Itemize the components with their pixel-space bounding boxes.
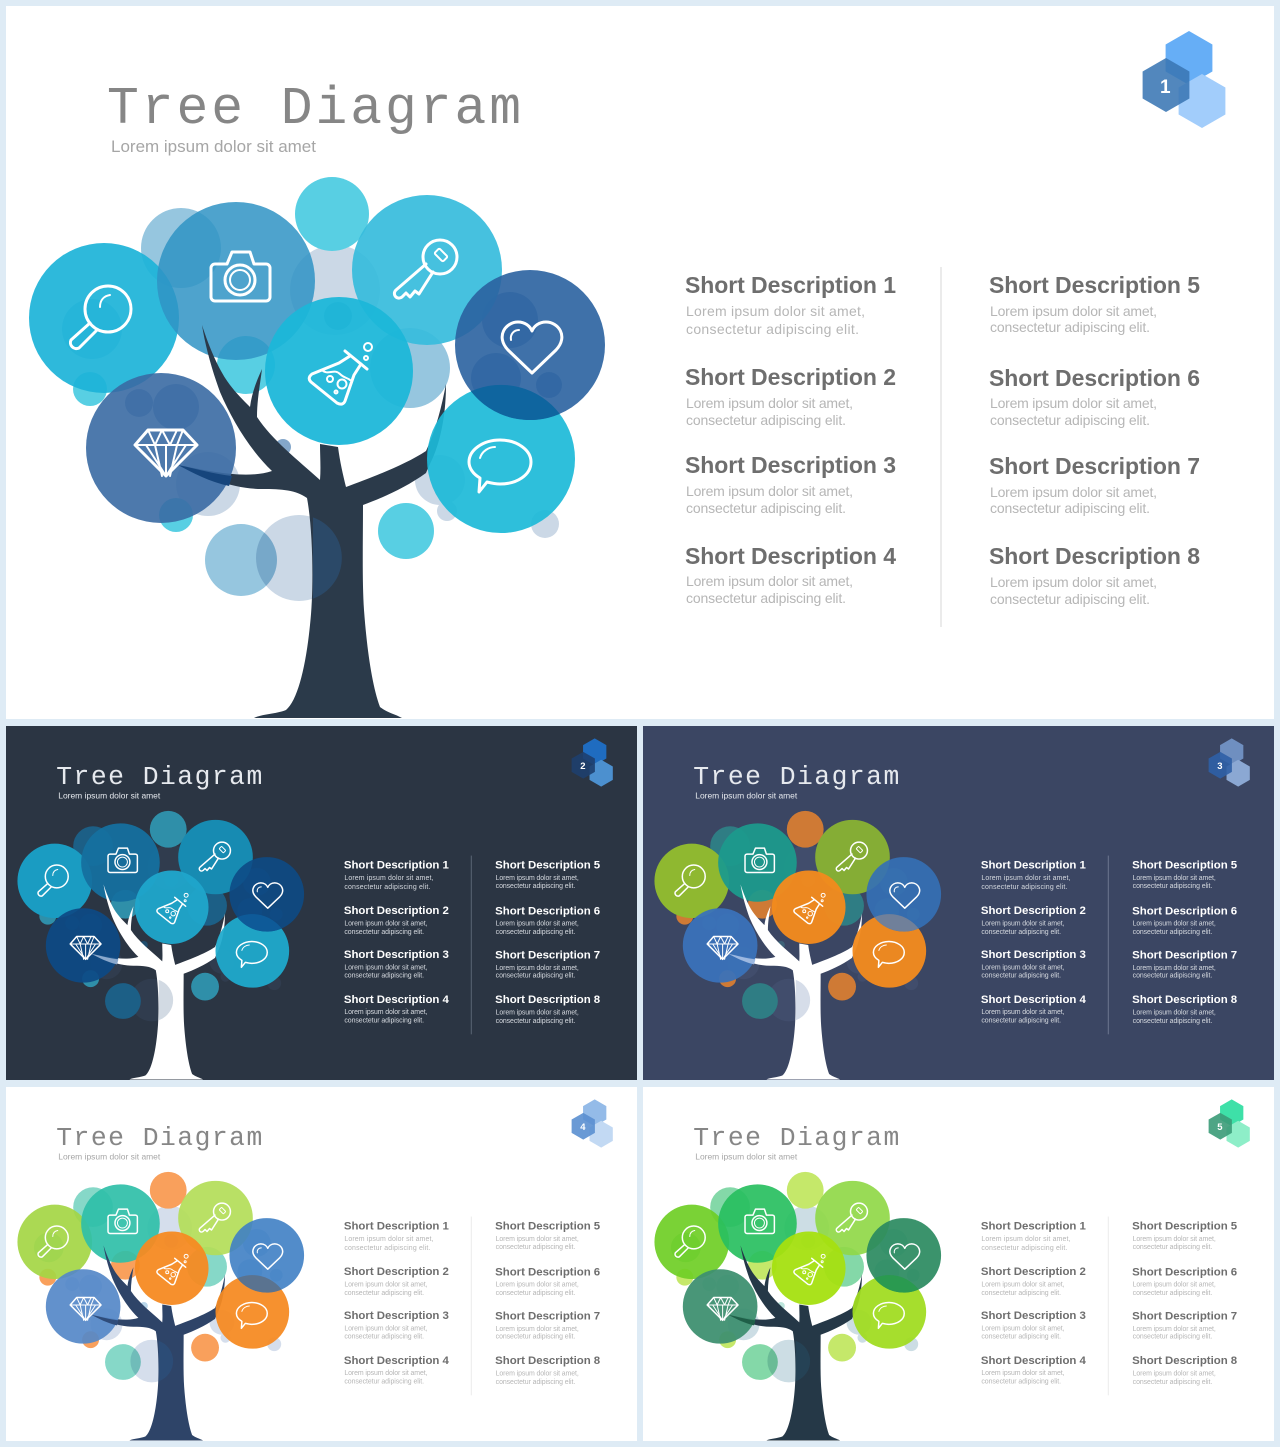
node: diamond xyxy=(86,373,236,523)
description 7: Short Description 7 xyxy=(989,453,1200,479)
description 3: Lorem ipsum dolor sit amet, xyxy=(344,964,428,971)
description 6 xyxy=(989,365,1200,428)
description 8: Short Description 8 xyxy=(1132,994,1237,1006)
description 1: Short Description 1 xyxy=(344,860,450,871)
description 8: Lorem ipsum dolor sit amet, xyxy=(1133,1370,1216,1377)
bubble tint on trunk xyxy=(796,980,810,1020)
background bubbles xyxy=(671,1172,920,1382)
badge: hexagons with number 2 xyxy=(572,738,613,787)
node: chat xyxy=(853,1275,926,1349)
description 3: Lorem ipsum dolor sit amet, xyxy=(981,1325,1065,1332)
node: chat xyxy=(853,914,926,988)
description 5: Lorem ipsum dolor sit amet, xyxy=(496,1236,579,1243)
description 5: Lorem ipsum dolor sit amet, xyxy=(496,875,579,882)
description 3: Short Description 3 xyxy=(685,452,896,478)
description 7: Short Description 7 xyxy=(495,1310,600,1322)
description 1: Lorem ipsum dolor sit amet, xyxy=(344,1236,434,1243)
node: heart xyxy=(866,1218,941,1293)
description 8 xyxy=(989,543,1200,607)
description 7: consectetur adipiscing elit. xyxy=(1133,1334,1212,1341)
description 3 xyxy=(344,1310,449,1341)
badge: hexagons with number 1: 1 xyxy=(1160,77,1171,98)
description 4 xyxy=(685,543,896,606)
description 4 xyxy=(981,1355,1087,1385)
description 4: Lorem ipsum dolor sit amet, xyxy=(686,573,853,589)
description 8: Short Description 8 xyxy=(495,994,600,1006)
node: flask xyxy=(135,1231,209,1305)
node: key xyxy=(352,195,502,345)
description 7: Short Description 7 xyxy=(495,949,600,961)
description 4 xyxy=(344,1355,450,1385)
description 6 xyxy=(495,906,600,936)
tree trunk xyxy=(92,884,225,1080)
description 3 xyxy=(981,949,1086,980)
node: heart xyxy=(229,1218,304,1293)
description 7: Short Description 7 xyxy=(1132,1310,1237,1322)
description 1 xyxy=(685,272,896,337)
description 4: consectetur adipiscing elit. xyxy=(981,1378,1061,1385)
node: search xyxy=(654,1205,729,1279)
description 6: consectetur adipiscing elit. xyxy=(1133,929,1212,936)
node: heart xyxy=(455,270,605,420)
node: diamond xyxy=(46,1269,120,1344)
panel: white multicolor theme xyxy=(6,1087,637,1441)
description 5: Lorem ipsum dolor sit amet, xyxy=(1133,875,1216,882)
description 3: consectetur adipiscing elit. xyxy=(981,973,1061,980)
node: flask xyxy=(135,870,209,944)
description 1: Short Description 1 xyxy=(685,272,896,298)
description 2: Lorem ipsum dolor sit amet, xyxy=(344,921,428,928)
description 2: consectetur adipiscing elit. xyxy=(981,1290,1061,1297)
panel: white green theme xyxy=(643,1087,1274,1441)
panel: main slide light blue theme xyxy=(6,6,1274,719)
description 6: Short Description 6 xyxy=(1132,906,1237,918)
description 3: Short Description 3 xyxy=(344,949,449,961)
description 8 xyxy=(1132,1355,1237,1386)
description 4: Short Description 4 xyxy=(344,994,450,1006)
description 7 xyxy=(1132,949,1237,980)
description 5 xyxy=(989,272,1200,335)
description 8: consectetur adipiscing elit. xyxy=(990,591,1150,607)
description 2: consectetur adipiscing elit. xyxy=(686,412,846,428)
description 4: Lorem ipsum dolor sit amet, xyxy=(981,1009,1065,1016)
description 7: Lorem ipsum dolor sit amet, xyxy=(1133,965,1216,972)
description 2: consectetur adipiscing elit. xyxy=(344,929,424,936)
description 3: Short Description 3 xyxy=(981,1310,1086,1322)
badge: hexagons with number 3 xyxy=(1209,738,1250,787)
description 2 xyxy=(981,905,1086,936)
node: heart xyxy=(866,857,941,932)
description 8: Lorem ipsum dolor sit amet, xyxy=(990,574,1157,590)
description 8: Lorem ipsum dolor sit amet, xyxy=(496,1370,579,1377)
description 1: Lorem ipsum dolor sit amet, xyxy=(981,875,1071,882)
description 5: consectetur adipiscing elit. xyxy=(990,319,1150,335)
description 2: Lorem ipsum dolor sit amet, xyxy=(686,395,853,411)
node: diamond xyxy=(683,908,757,983)
node: chat xyxy=(216,914,289,988)
description 5: Short Description 5 xyxy=(495,1221,601,1232)
bubble tint on trunk xyxy=(313,517,342,599)
description 4: consectetur adipiscing elit. xyxy=(981,1017,1061,1024)
description 5: Short Description 5 xyxy=(495,860,601,871)
subtitle: Lorem ipsum dolor sit amet xyxy=(58,790,161,800)
tree trunk xyxy=(178,325,446,718)
description 5: consectetur adipiscing elit. xyxy=(1133,1244,1212,1251)
description 6: Short Description 6 xyxy=(495,906,600,918)
description 1: consectetur adipiscing elit. xyxy=(981,884,1068,891)
description 1 xyxy=(981,860,1087,891)
description 3 xyxy=(981,1310,1086,1341)
panel: dark slate theme xyxy=(6,726,637,1080)
description 1 xyxy=(344,860,450,891)
description 3: Lorem ipsum dolor sit amet, xyxy=(981,964,1065,971)
description 3: consectetur adipiscing elit. xyxy=(981,1334,1061,1341)
description 2 xyxy=(344,1266,449,1297)
description 3 xyxy=(685,452,896,516)
description 1: consectetur adipiscing elit. xyxy=(981,1245,1068,1252)
description 3: Lorem ipsum dolor sit amet, xyxy=(344,1325,428,1332)
description 6: Lorem ipsum dolor sit amet, xyxy=(496,921,579,928)
description 7: Lorem ipsum dolor sit amet, xyxy=(496,1326,579,1333)
description 7: consectetur adipiscing elit. xyxy=(1133,973,1212,980)
title: Tree Diagram xyxy=(56,1123,262,1153)
description 7 xyxy=(1132,1310,1237,1341)
badge: hexagons with number 3: 3 xyxy=(1217,761,1223,772)
description 3: consectetur adipiscing elit. xyxy=(344,1334,424,1341)
description 7: consectetur adipiscing elit. xyxy=(990,500,1150,516)
description 6: Short Description 6 xyxy=(1132,1267,1237,1279)
description 2: Short Description 2 xyxy=(685,364,896,390)
background bubbles xyxy=(34,811,283,1021)
description 4: Short Description 4 xyxy=(344,1355,450,1367)
description 2: Lorem ipsum dolor sit amet, xyxy=(981,921,1065,928)
node: diamond xyxy=(46,908,120,983)
description 4: Lorem ipsum dolor sit amet, xyxy=(344,1370,428,1377)
description 6: Lorem ipsum dolor sit amet, xyxy=(990,395,1157,411)
description 3: consectetur adipiscing elit. xyxy=(686,500,846,516)
description 5 xyxy=(1132,1221,1238,1251)
column divider xyxy=(940,267,942,627)
node: camera xyxy=(81,1184,160,1263)
description 2 xyxy=(344,905,449,936)
description 1: Lorem ipsum dolor sit amet, xyxy=(981,1236,1071,1243)
background bubbles xyxy=(34,1172,283,1382)
description 1: Lorem ipsum dolor sit amet, xyxy=(344,875,434,882)
background bubbles xyxy=(671,811,920,1021)
description 7: Lorem ipsum dolor sit amet, xyxy=(496,965,579,972)
description 4: Short Description 4 xyxy=(981,1355,1087,1367)
description 2: Lorem ipsum dolor sit amet, xyxy=(344,1282,428,1289)
description 8: Lorem ipsum dolor sit amet, xyxy=(1133,1009,1216,1016)
description 2: consectetur adipiscing elit. xyxy=(344,1290,424,1297)
description 6: consectetur adipiscing elit. xyxy=(496,929,575,936)
description 8: consectetur adipiscing elit. xyxy=(496,1018,575,1025)
bubble tint on trunk xyxy=(159,980,173,1020)
description 1: Short Description 1 xyxy=(344,1221,450,1232)
node: flask xyxy=(772,1231,846,1305)
description 7 xyxy=(495,949,600,980)
bubble tint on trunk xyxy=(159,1341,173,1381)
node: search xyxy=(17,844,92,918)
node: camera xyxy=(718,1184,797,1263)
title: Tree Diagram xyxy=(56,762,262,792)
description 6: consectetur adipiscing elit. xyxy=(496,1290,575,1297)
description 3: Lorem ipsum dolor sit amet, xyxy=(686,483,853,499)
node: key xyxy=(815,1181,890,1255)
description 5: Short Description 5 xyxy=(1132,1221,1238,1232)
description 4: consectetur adipiscing elit. xyxy=(344,1378,424,1385)
title: Tree Diagram xyxy=(107,79,521,139)
description 2: Short Description 2 xyxy=(344,1266,449,1278)
description 5 xyxy=(1132,860,1238,890)
description 2: Lorem ipsum dolor sit amet, xyxy=(981,1282,1065,1289)
description 8: consectetur adipiscing elit. xyxy=(496,1379,575,1386)
description 4 xyxy=(344,994,450,1024)
tree trunk xyxy=(729,1245,862,1441)
description 3: Short Description 3 xyxy=(981,949,1086,961)
column divider xyxy=(1107,1217,1110,1395)
description 8 xyxy=(1132,994,1237,1025)
description 2: Short Description 2 xyxy=(981,1266,1086,1278)
description 7: Lorem ipsum dolor sit amet, xyxy=(990,484,1157,500)
description 7 xyxy=(989,453,1200,516)
badge: hexagons with number 4 xyxy=(572,1099,613,1148)
description 5: Short Description 5 xyxy=(1132,860,1238,871)
description 3 xyxy=(344,949,449,980)
description 4: Lorem ipsum dolor sit amet, xyxy=(981,1370,1065,1377)
description 6: Lorem ipsum dolor sit amet, xyxy=(1133,1282,1216,1289)
description 6 xyxy=(1132,906,1237,936)
subtitle: Lorem ipsum dolor sit amet xyxy=(695,790,798,800)
description 1 xyxy=(344,1221,450,1252)
description 8: Short Description 8 xyxy=(989,543,1200,569)
description 4: consectetur adipiscing elit. xyxy=(344,1017,424,1024)
description 1: consectetur adipiscing elit. xyxy=(686,321,859,337)
description 8 xyxy=(495,994,600,1025)
node: camera xyxy=(157,202,315,360)
tree trunk xyxy=(729,884,862,1080)
description 5: consectetur adipiscing elit. xyxy=(496,1244,575,1251)
panel: navy multicolor theme xyxy=(643,726,1274,1080)
description 6: Short Description 6 xyxy=(495,1267,600,1279)
node: search xyxy=(654,844,729,918)
badge: hexagons with number 4: 4 xyxy=(580,1122,586,1133)
node: search xyxy=(29,243,179,393)
title: Tree Diagram xyxy=(693,762,899,792)
description 7: consectetur adipiscing elit. xyxy=(496,973,575,980)
badge: hexagons with number 2: 2 xyxy=(580,761,586,772)
description 1 xyxy=(981,1221,1087,1252)
description 6 xyxy=(495,1267,600,1297)
description 3: consectetur adipiscing elit. xyxy=(344,973,424,980)
badge: hexagons with number 1 xyxy=(1143,31,1225,128)
description 4: Short Description 4 xyxy=(981,994,1087,1006)
title: Tree Diagram xyxy=(693,1123,899,1153)
description 2: consectetur adipiscing elit. xyxy=(981,929,1061,936)
description 7 xyxy=(495,1310,600,1341)
description 4: Short Description 4 xyxy=(685,543,896,569)
description 8: consectetur adipiscing elit. xyxy=(1133,1018,1212,1025)
column divider xyxy=(470,1217,473,1395)
description 2 xyxy=(981,1266,1086,1297)
description 5: consectetur adipiscing elit. xyxy=(496,883,575,890)
description 4: consectetur adipiscing elit. xyxy=(686,590,846,606)
description 6: consectetur adipiscing elit. xyxy=(1133,1290,1212,1297)
description 6: Short Description 6 xyxy=(989,365,1200,391)
description 1: Short Description 1 xyxy=(981,860,1087,871)
description 6: Lorem ipsum dolor sit amet, xyxy=(1133,921,1216,928)
description 4: Lorem ipsum dolor sit amet, xyxy=(344,1009,428,1016)
node: flask xyxy=(265,297,413,445)
subtitle: Lorem ipsum dolor sit amet xyxy=(111,137,316,156)
node: key xyxy=(178,1181,253,1255)
description 2: Short Description 2 xyxy=(344,905,449,917)
description 5: Short Description 5 xyxy=(989,272,1200,298)
node: flask xyxy=(772,870,846,944)
description 5 xyxy=(495,1221,601,1251)
node: diamond xyxy=(683,1269,757,1344)
subtitle: Lorem ipsum dolor sit amet xyxy=(58,1151,161,1161)
description 4 xyxy=(981,994,1087,1024)
description 3: Short Description 3 xyxy=(344,1310,449,1322)
column divider xyxy=(470,856,473,1034)
description 5: Lorem ipsum dolor sit amet, xyxy=(1133,1236,1216,1243)
node: key xyxy=(178,820,253,894)
description 5 xyxy=(495,860,601,890)
node: chat xyxy=(216,1275,289,1349)
description 1: Short Description 1 xyxy=(981,1221,1087,1232)
node: key xyxy=(815,820,890,894)
badge: hexagons with number 5 xyxy=(1209,1099,1250,1148)
description 1: Lorem ipsum dolor sit amet, xyxy=(686,303,865,319)
description 7: Short Description 7 xyxy=(1132,949,1237,961)
column divider xyxy=(1107,856,1110,1034)
description 6: consectetur adipiscing elit. xyxy=(990,412,1150,428)
bubble tint on trunk xyxy=(796,1341,810,1381)
description 6 xyxy=(1132,1267,1237,1297)
description 7: consectetur adipiscing elit. xyxy=(496,1334,575,1341)
description 1: consectetur adipiscing elit. xyxy=(344,884,431,891)
node: search xyxy=(17,1205,92,1279)
subtitle: Lorem ipsum dolor sit amet xyxy=(695,1151,798,1161)
description 1: consectetur adipiscing elit. xyxy=(344,1245,431,1252)
node: camera xyxy=(81,823,160,902)
description 8 xyxy=(495,1355,600,1386)
node: chat xyxy=(427,385,575,533)
description 5: Lorem ipsum dolor sit amet, xyxy=(990,303,1157,319)
description 7: Lorem ipsum dolor sit amet, xyxy=(1133,1326,1216,1333)
node: camera xyxy=(718,823,797,902)
description 2 xyxy=(685,364,896,428)
tree trunk xyxy=(92,1245,225,1441)
description 8: Short Description 8 xyxy=(495,1355,600,1367)
description 8: consectetur adipiscing elit. xyxy=(1133,1379,1212,1386)
node: heart xyxy=(229,857,304,932)
description 6: Lorem ipsum dolor sit amet, xyxy=(496,1282,579,1289)
description 5: consectetur adipiscing elit. xyxy=(1133,883,1212,890)
description 2: Short Description 2 xyxy=(981,905,1086,917)
description 8: Short Description 8 xyxy=(1132,1355,1237,1367)
badge: hexagons with number 5: 5 xyxy=(1217,1122,1223,1133)
description 8: Lorem ipsum dolor sit amet, xyxy=(496,1009,579,1016)
background bubbles xyxy=(62,177,562,601)
